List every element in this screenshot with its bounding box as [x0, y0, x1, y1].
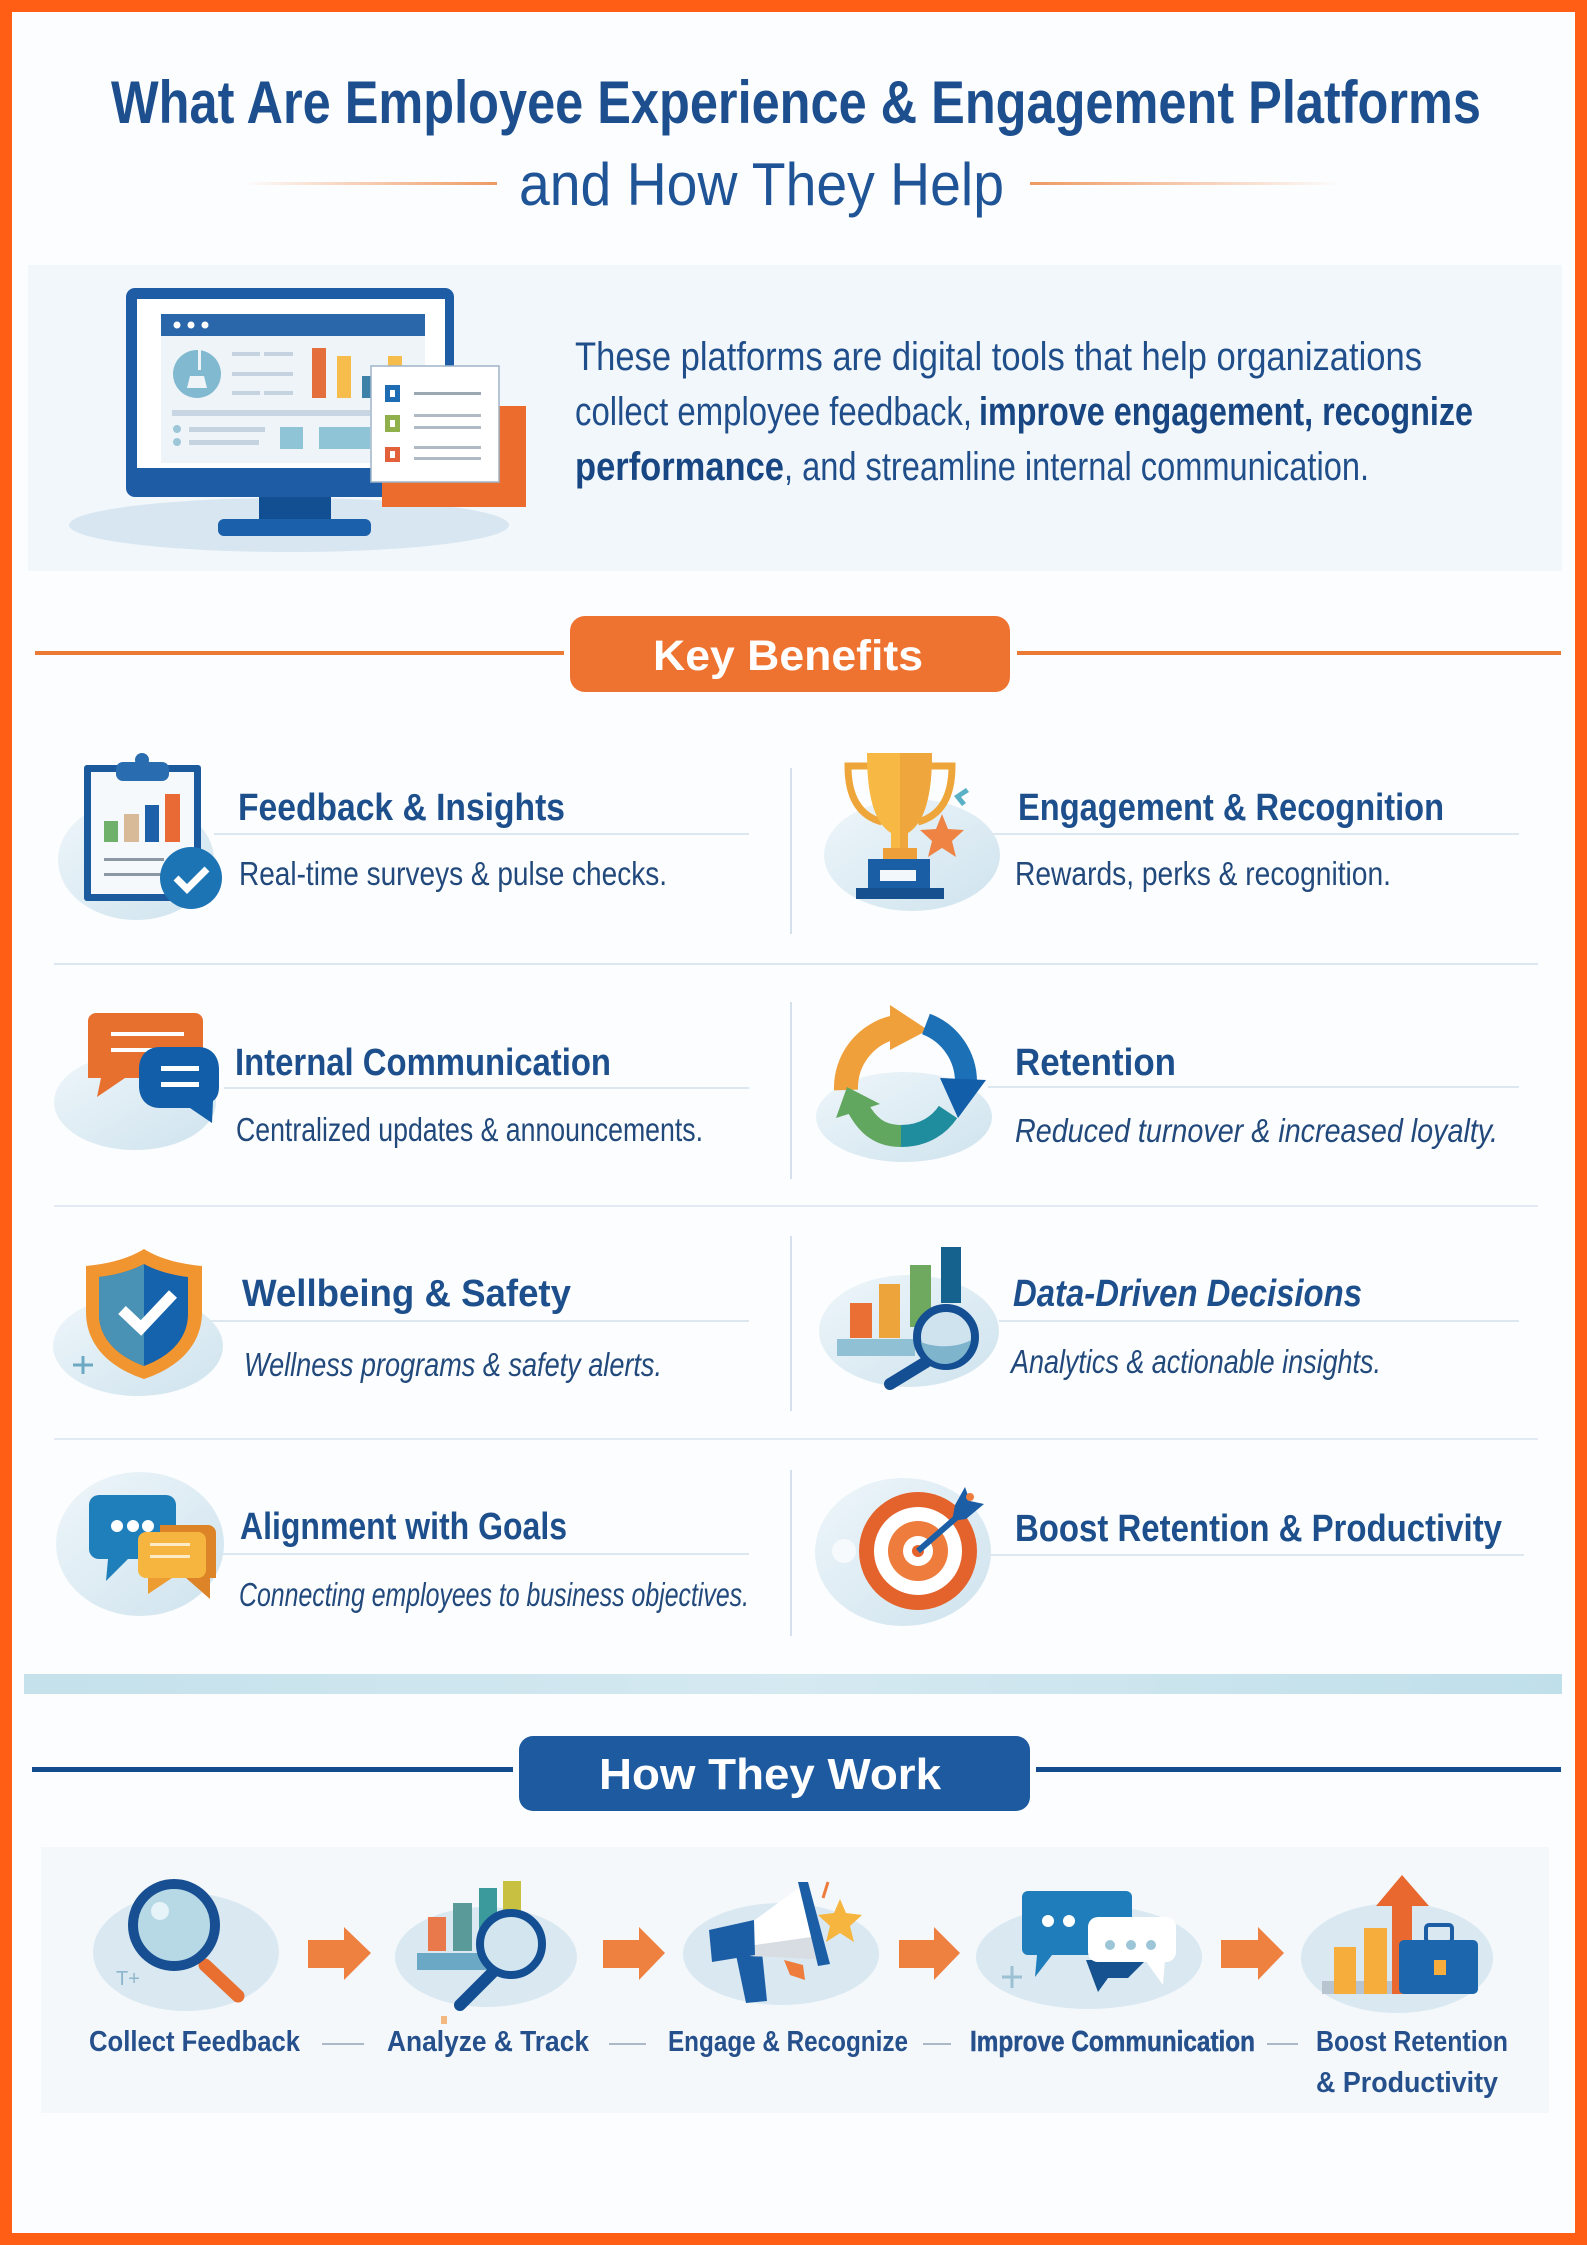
panel: intro	[28, 265, 1562, 571]
benefit: Engagement & Recognition: Rewards, perks & recognition.	[1015, 855, 1391, 892]
intro text: These platforms are digital tools that help organizations	[575, 335, 1422, 379]
icon: megaphone with star	[683, 1882, 879, 2005]
step: Analyze & Track: Analyze & Track	[387, 2026, 590, 2058]
step: Collect Feedback: Collect Feedback	[89, 2026, 301, 2058]
step: Analyze & Track	[387, 1881, 590, 2058]
icon: trophy with star	[824, 753, 1000, 911]
benefit: Engagement & Recognition: Engagement & Recognition	[1018, 787, 1444, 829]
title: and How They Help	[519, 151, 1004, 218]
benefit: Data-Driven Decisions	[819, 1247, 1519, 1387]
benefit: Internal Communication	[54, 1013, 749, 1150]
step: Boost Retention & Productivity	[1301, 1875, 1508, 2099]
step: Boost Retention & Productivity: & Productivity	[1316, 2067, 1498, 2099]
benefit: Retention: Retention	[1015, 1042, 1176, 1084]
step: Collect Feedback	[89, 1884, 301, 2058]
panel: process steps	[41, 1847, 1549, 2113]
benefit: Feedback & Insights: Real-time surveys & pulse checks.	[239, 855, 667, 892]
heading: Key Benefits	[35, 616, 1561, 692]
benefit: Wellbeing & Safety: Wellness programs & safety alerts.	[244, 1346, 662, 1383]
benefit: Data-Driven Decisions: Data-Driven Decisions	[1013, 1273, 1362, 1315]
benefit: Boost Retention & Productivity	[815, 1478, 1524, 1626]
step: Improve Communication	[970, 1891, 1255, 2058]
benefit: Data-Driven Decisions: Analytics & actionable insights.	[1009, 1343, 1381, 1380]
icon: bar chart with magnifier	[819, 1247, 999, 1387]
icon: magnifying glass	[93, 1884, 279, 2011]
step: Engage & Recognize	[668, 1882, 908, 2058]
intro text: improve engagement, recognize	[979, 390, 1473, 434]
icon: chat bubbles	[976, 1891, 1202, 2009]
benefit: Feedback & Insights	[58, 753, 749, 920]
arrow	[603, 1927, 665, 1980]
heading: Key Benefits: Key Benefits	[653, 632, 923, 680]
icon: clipboard with chart	[58, 753, 222, 920]
icon: target with dart	[815, 1478, 991, 1626]
benefit: Wellbeing & Safety	[53, 1249, 749, 1396]
intro text	[575, 335, 1473, 489]
benefit: Internal Communication: Centralized updates & announcements.	[236, 1111, 703, 1148]
icon: shield with check	[53, 1249, 223, 1396]
benefit: Alignment with Goals: Alignment with Goals	[240, 1506, 567, 1548]
icon: overlapping chat bubbles	[56, 1472, 224, 1616]
benefit: Engagement & Recognition	[824, 753, 1519, 911]
icon: growth chart with briefcase	[1301, 1875, 1493, 2013]
step: Improve Communication: Improve Communication	[970, 2026, 1255, 2058]
benefit: Feedback & Insights: Feedback & Insights	[238, 787, 565, 829]
benefit: Internal Communication: Internal Communication	[235, 1042, 611, 1084]
benefit: Retention	[816, 1005, 1519, 1162]
benefit: Alignment with Goals: Connecting employees to business objectives.	[239, 1576, 749, 1613]
intro text: , and streamline internal communication.	[784, 445, 1369, 489]
icon: circular arrows	[816, 1005, 992, 1162]
step: Boost Retention & Productivity: Boost Retention	[1316, 2026, 1508, 2058]
title	[111, 69, 1481, 218]
icon: computer monitor dashboard	[69, 288, 526, 552]
benefit: Retention: Reduced turnover & increased loyalty.	[1015, 1112, 1498, 1149]
icon: bars with magnifier	[395, 1881, 577, 2024]
arrow	[1221, 1927, 1284, 1980]
intro text: performance	[575, 445, 784, 489]
benefit: Wellbeing & Safety: Wellbeing & Safety	[242, 1273, 571, 1315]
step: Engage & Recognize: Engage & Recognize	[668, 2026, 908, 2058]
arrow	[308, 1927, 371, 1980]
heading: How They Work	[32, 1736, 1561, 1811]
icon: speech bubbles	[54, 1013, 219, 1150]
benefit: Boost Retention & Productivity: Boost Retention & Productivity	[1015, 1508, 1502, 1550]
arrow	[899, 1927, 960, 1980]
benefit: Alignment with Goals	[56, 1472, 749, 1616]
intro text: collect employee feedback,	[575, 390, 972, 434]
icon: magnifying glass: T+	[116, 1968, 140, 1990]
heading: How They Work: How They Work	[599, 1750, 942, 1799]
